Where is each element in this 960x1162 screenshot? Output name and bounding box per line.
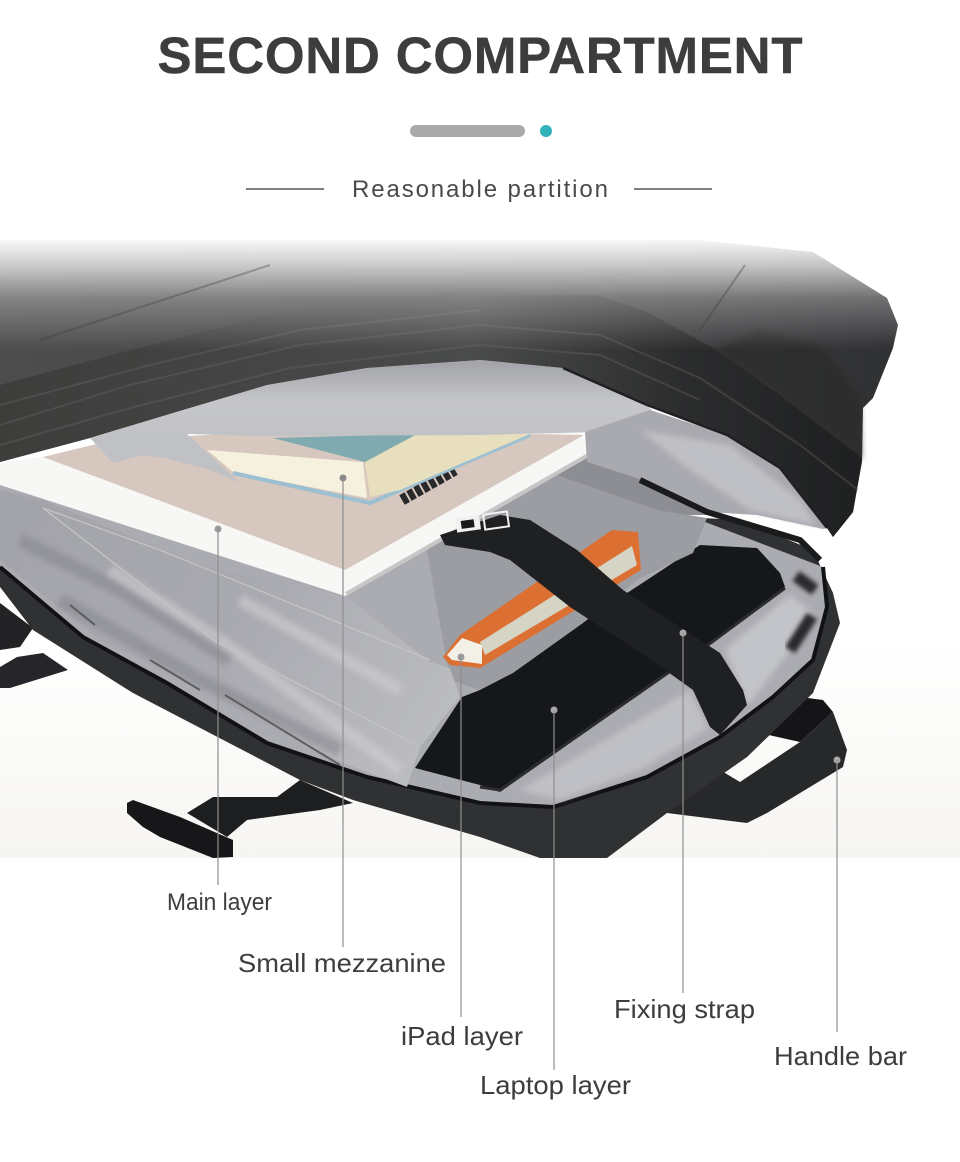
callout: main layer bbox=[167, 526, 272, 916]
zipper on lower shell bbox=[0, 567, 827, 807]
flap dark seam pocket bbox=[712, 330, 862, 460]
flap edge soft stitching bbox=[40, 265, 745, 340]
fixing strap bbox=[440, 515, 747, 735]
flap lining highlight bbox=[640, 430, 815, 525]
flap fade to white bbox=[0, 236, 960, 350]
notebook rounded corner bbox=[447, 638, 482, 664]
callout: small mezzanine: Small mezzanine bbox=[238, 948, 446, 978]
lower lining highlight bbox=[520, 690, 708, 800]
inner zipper edge bbox=[563, 368, 827, 528]
handle front webbing bbox=[667, 712, 847, 823]
flap inner lining bbox=[90, 360, 670, 483]
callout: laptop layer: Laptop layer bbox=[480, 1070, 631, 1100]
callout: ipad layer bbox=[401, 654, 523, 1051]
main layer lining base bbox=[0, 480, 827, 807]
flap outer fabric bbox=[0, 240, 898, 537]
lining interior shadow slit bbox=[70, 605, 340, 765]
flap zipper ridges bbox=[0, 310, 858, 490]
front quilted pocket bbox=[0, 490, 460, 787]
callout: fixing strap: Fixing strap bbox=[614, 994, 755, 1024]
subtitle with side rules: Reasonable partition bbox=[352, 176, 608, 203]
divider zipper bbox=[640, 480, 820, 560]
callout: fixing strap bbox=[614, 630, 755, 1024]
pocket satin highlights bbox=[110, 570, 400, 770]
notebook pages bbox=[480, 546, 637, 655]
lining behind sleeve bbox=[540, 452, 712, 515]
upper ipad sleeve bbox=[425, 475, 707, 690]
laptop front edge bbox=[480, 588, 785, 790]
pocket satin shadows bbox=[20, 540, 340, 750]
callout: laptop layer bbox=[480, 706, 631, 1100]
handle back webbing bbox=[760, 697, 833, 742]
orange notebook bbox=[443, 530, 641, 668]
book bottom cover bbox=[233, 435, 530, 503]
side webbing strap bbox=[187, 780, 353, 837]
book right pages bbox=[365, 434, 530, 497]
strap label bbox=[455, 511, 509, 533]
book cover bbox=[273, 434, 417, 462]
book page block bbox=[207, 450, 367, 498]
flap zipper band bbox=[0, 295, 862, 537]
callout: main layer: Main layer bbox=[167, 889, 272, 916]
magazine cover bbox=[43, 430, 584, 570]
lower shell of the bag bbox=[0, 480, 840, 858]
backpack photo illustration bbox=[0, 236, 960, 858]
left strap buckle bbox=[0, 653, 68, 688]
magazine lettering bbox=[402, 470, 455, 500]
magazine page edge bbox=[346, 454, 590, 594]
callout: small mezzanine bbox=[238, 474, 446, 978]
slider indicator bbox=[410, 125, 552, 137]
left shoulder strap bbox=[0, 603, 33, 650]
pocket stitching bbox=[43, 508, 430, 743]
callout: handle bar: Handle bar bbox=[774, 1041, 907, 1071]
callout: handle bar bbox=[774, 756, 907, 1071]
right satin pillow highlight bbox=[725, 595, 812, 705]
flap inner lining right bbox=[585, 410, 827, 529]
callout: ipad layer: iPad layer bbox=[401, 1021, 523, 1051]
magazine bbox=[0, 430, 590, 596]
crumpled dark lining bbox=[790, 576, 815, 650]
title: SECOND COMPARTMENT bbox=[158, 27, 802, 84]
laptop bbox=[415, 545, 785, 792]
floor shading bbox=[0, 640, 960, 858]
plastic buckle bbox=[127, 800, 233, 858]
